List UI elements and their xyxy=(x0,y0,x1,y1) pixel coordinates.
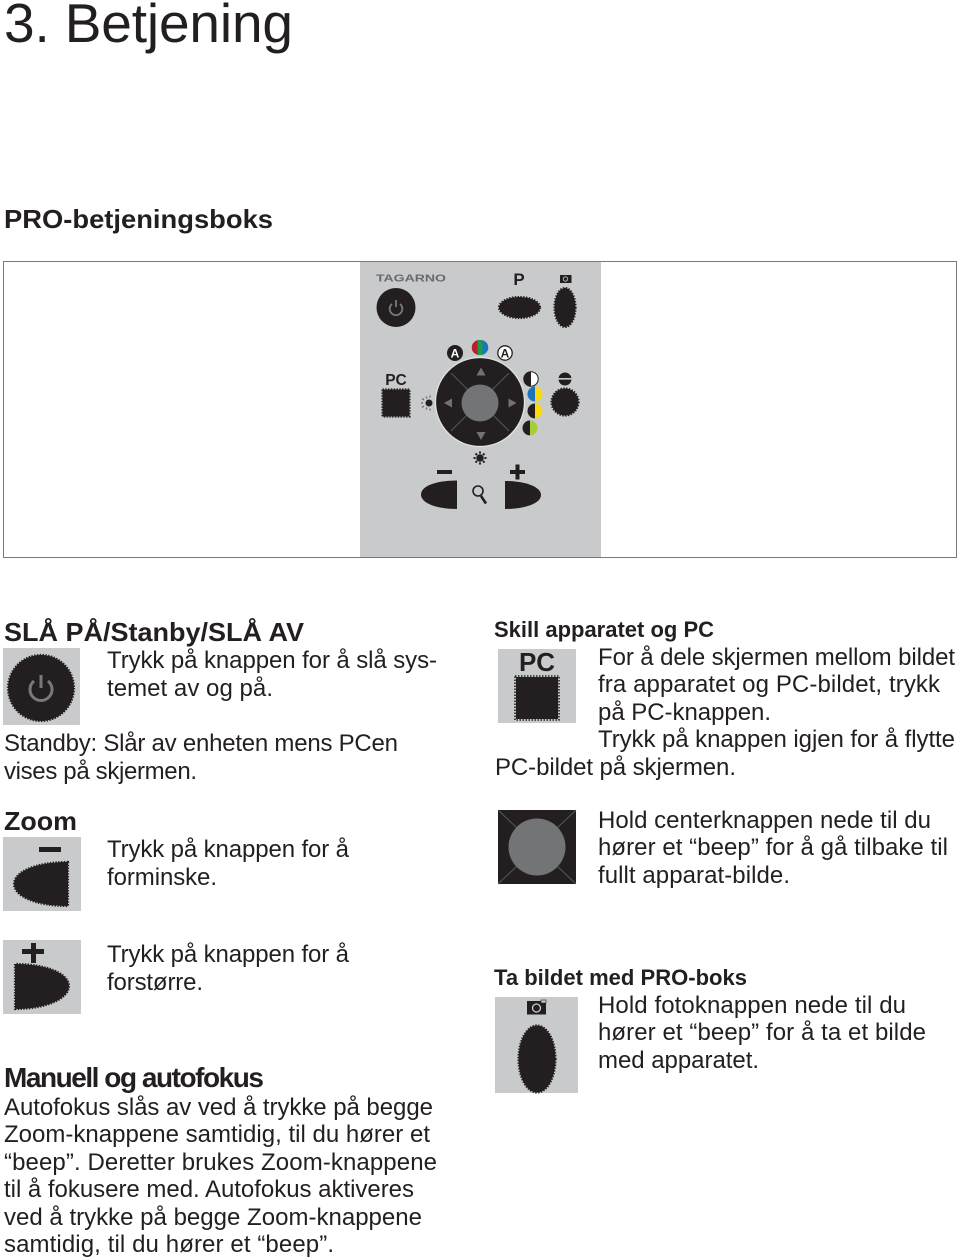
icon: PC button tile xyxy=(498,647,576,723)
text: centre button xyxy=(598,807,948,889)
text: centre button: fullt apparat-bilde. xyxy=(598,862,790,889)
heading: PRO-betjeningsboks: PRO-betjeningsboks xyxy=(4,204,273,234)
text: power instructions xyxy=(4,647,437,785)
text: power instructions: vises på skjermen. xyxy=(4,758,197,785)
auto buttons: A xyxy=(451,346,460,360)
section: PC split xyxy=(494,617,955,781)
heading: PC split: Skill apparatet og PC xyxy=(494,617,714,642)
text: focus instructions xyxy=(4,1094,437,1258)
icon: camera button tile xyxy=(495,997,578,1093)
text: PC split instructions: fra apparatet og PC-bildet, trykk xyxy=(598,671,941,698)
text: focus instructions: “beep”. Deretter brukes Zoom-knappene xyxy=(4,1149,437,1176)
panel: control box frame xyxy=(4,262,956,558)
zoom plus button xyxy=(505,464,541,509)
P button xyxy=(499,270,540,318)
text: photo instructions: Hold fotoknappen nede til du xyxy=(598,992,906,1019)
PC button xyxy=(382,372,410,416)
magnifier icon xyxy=(473,486,486,504)
text: photo instructions: med apparatet. xyxy=(598,1047,759,1074)
text: focus instructions: ved å trykke på begge Zoom-knappene xyxy=(4,1204,422,1231)
colour icon xyxy=(472,340,488,355)
text: photo instructions: hører et “beep” for å ta et bilde xyxy=(598,1019,926,1046)
text: power instructions: temet av og på. xyxy=(107,675,273,702)
text: zoom plus xyxy=(107,941,350,996)
text: focus instructions: Autofokus slås av ved å trykke på begge xyxy=(4,1094,433,1121)
auxiliary button xyxy=(552,372,578,416)
PC button: PC xyxy=(385,372,407,389)
text: photo instructions xyxy=(598,992,926,1074)
icon: zoom plus tile xyxy=(3,940,81,1014)
text: power instructions: Trykk på knappen for å slå sys- xyxy=(107,647,437,674)
navigation dial xyxy=(436,358,524,446)
section: power xyxy=(3,617,437,785)
text: PC split instructions: på PC-knappen. xyxy=(598,699,771,726)
P button: P xyxy=(513,270,525,289)
section: focus xyxy=(4,1062,437,1258)
icon: centre button tile xyxy=(498,810,576,884)
heading: photo: Ta bildet med PRO-boks xyxy=(494,965,747,990)
section: photo xyxy=(494,965,926,1093)
text: zoom minus: Trykk på knappen for å xyxy=(107,836,350,863)
text: zoom minus xyxy=(107,836,350,891)
icon: power button tile xyxy=(3,648,80,725)
power button xyxy=(376,288,416,327)
text: focus instructions: til å fokusere med. Autofokus aktiveres xyxy=(4,1176,414,1203)
icon: zoom minus tile xyxy=(3,837,81,911)
brightness low icon xyxy=(421,396,432,410)
auto buttons: A xyxy=(501,346,510,360)
brightness high icon xyxy=(474,452,486,464)
text: centre button: hører et “beep” for å gå tilbake til xyxy=(598,834,948,861)
camera button xyxy=(554,275,576,327)
icon: PC button tile: PC xyxy=(519,647,555,677)
heading: zoom: Zoom xyxy=(4,806,77,836)
brand label: TAGARNO xyxy=(376,272,446,284)
contrast and colour balance icons xyxy=(523,372,542,436)
text: power instructions: Standby: Slår av enheten mens PCen xyxy=(4,730,398,757)
text: PC split instructions: For å dele skjermen mellom bildet xyxy=(598,644,955,671)
section: centre button xyxy=(498,807,948,889)
text: centre button: Hold centerknappen nede til du xyxy=(598,807,931,834)
heading: power: SLÅ PÅ/Stanby/SLÅ AV xyxy=(4,617,305,647)
zoom minus button xyxy=(421,470,457,509)
auto buttons xyxy=(447,345,512,361)
text: focus instructions: samtidig, til du hører et “beep”. xyxy=(4,1231,334,1258)
text: zoom plus: Trykk på knappen for å xyxy=(107,941,350,968)
text: PC split instructions xyxy=(495,644,955,781)
text: focus instructions: Zoom-knappene samtidig, til du hører et xyxy=(4,1121,430,1148)
control box grey face xyxy=(360,262,601,557)
text: zoom minus: forminske. xyxy=(107,864,217,891)
section: zoom xyxy=(3,806,350,1014)
text: PC split instructions: PC-bildet på skjermen. xyxy=(495,754,736,781)
text: PC split instructions: Trykk på knappen igjen for å flytte xyxy=(598,726,955,753)
heading: focus: Manuell og autofokus xyxy=(4,1062,264,1093)
text: zoom plus: forstørre. xyxy=(107,969,203,996)
